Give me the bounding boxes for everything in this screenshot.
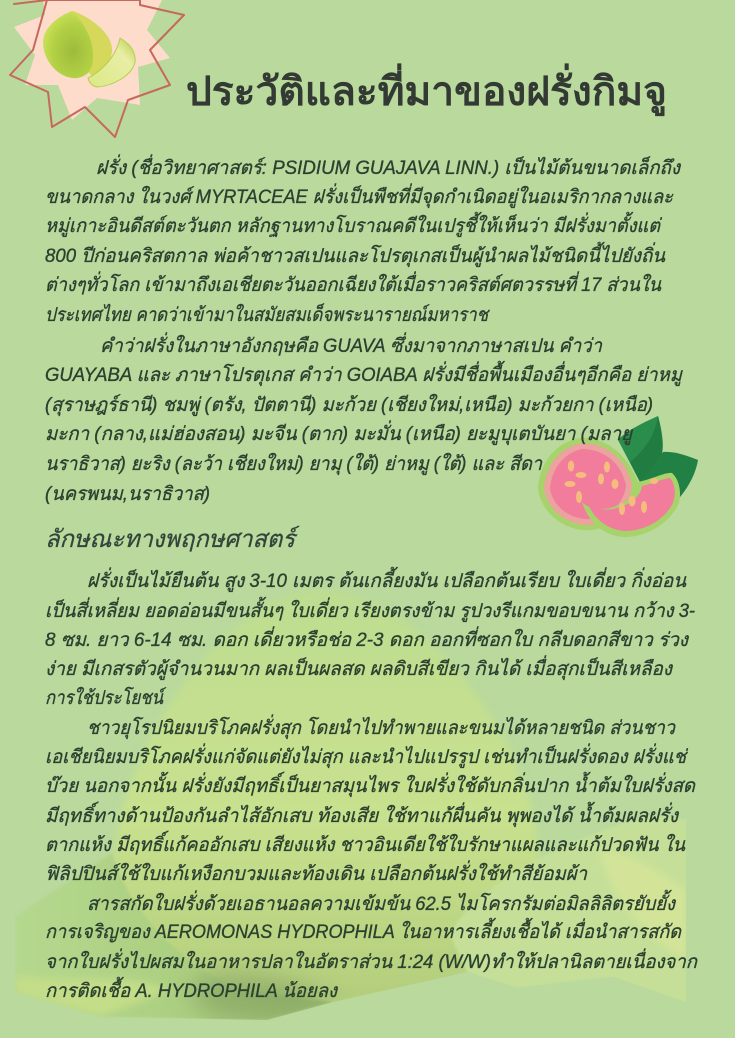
text block: extract research: การติดเชื้อ A. HYDROPHILA น้อยลง	[45, 976, 339, 1002]
icon: green guava with slice	[43, 11, 135, 87]
text block: uses: เอเชียนิยมบริโภคฝรั่งแก่จัดแต่ยังไม่สุก และนำไปแปรรูป เช่นทำเป็นฝรั่งดอง ฝรั่งแช่	[45, 743, 689, 768]
text block: names: GUAYABA และ ภาษาโปรตุเกส คำว่า GOIABA ฝรั่งมีชื่อพื้นเมืองอื่นๆอีกคือ ย่าหมู	[45, 360, 683, 386]
icon: guava slice	[582, 473, 680, 537]
text block: extract research: จากใบฝรั่งไปผสมในอาหารปลาในอัตราส่วน 1:24 (W/W)ทำให้ปลานิลตายเนื่องจาก	[45, 948, 698, 973]
text block: names: คำว่าฝรั่งในภาษาอังกฤษคือ GUAVA ซึ่งมาจากภาษาสเปน คำว่า	[100, 332, 603, 357]
icon: slice seeds	[619, 478, 658, 515]
text block: botanical description: 8 ซม. ยาว 6-14 ซม. ดอก เดี่ยวหรือช่อ 2-3 ดอก ออกที่ซอกใบ กลีบดอกสีขาว ร่วง	[45, 626, 690, 651]
text block: uses	[45, 714, 697, 885]
text block: botanical description: เป็นสี่เหลี่ยม ยอดอ่อนมีขนสั้นๆ ใบเดี่ยว เรียงตรงข้าม รูปวงรีแกมขอบขนาน กว้าง 3-	[45, 596, 695, 622]
leaf	[15, 853, 333, 1020]
guava slice	[88, 38, 135, 87]
text block: names: มะกา (กลาง,แม่ฮ่องสอน) มะจีน (ตาก) มะมั่น (เหนือ) ยะมูบุเตบันยา (มลายู	[45, 420, 634, 445]
text block: botanical description: ง่าย มีเกสรตัวผู้จำนวนมาก ผลเป็นผลสด ผลดิบสีเขียว กินได้ เมื่อสุกเป็นสีเหลือง	[45, 655, 674, 680]
text block: botanical description: ฝรั่งเป็นไม้ยืนต้น สูง 3-10 เมตร ต้นเกลี้ยงมัน เปลือกต้นเรียบ ใบเดี่ยว กิ่งอ่อน	[87, 566, 687, 592]
text block: history: ต่างๆทั่วโลก เข้ามาถึงเอเชียตะวันออกเฉียงใต้เมื่อราวคริสต์ศตวรรษที่ 17 ส่วนใน	[45, 271, 662, 296]
text block: names	[45, 332, 683, 505]
guava back section	[60, 11, 112, 76]
text block: uses: ชาวยุโรปนิยมบริโภคฝรั่งสุก โดยนำไปทำพายและขนมได้หลายชนิด ส่วนชาว	[87, 714, 676, 739]
heading: botanical characteristics: ลักษณะทางพฤกษศาสตร์	[45, 525, 300, 553]
icon: guava seeds	[564, 460, 618, 503]
star outline	[10, 0, 184, 137]
icon: pink guava with leaves	[538, 416, 698, 537]
title: ประวัติและที่มาของฝรั่งกิมจู	[186, 63, 667, 116]
text block: history: หมู่เกาะอินดีสต์ตะวันตก หลักฐานทางโบราณคดีในเปรูชี้ให้เห็นว่า มีฝรั่งมาตั้งแต่	[45, 211, 663, 237]
guava front section	[43, 11, 93, 78]
text block: names: (นครพนม,นราธิวาส)	[45, 484, 210, 505]
text block: history: 800 ปีก่อนคริสตกาล พ่อค้าชาวสเปนและโปรตุเกสเป็นผู้นำผลไม้ชนิดนี้ไปยังถิ่น	[45, 241, 666, 267]
text block: uses: ฟิลิปปินส์ใช้ใบแก้เหงือกบวมและท้องเดิน เปลือกต้นฝรั่งใช้ทำสีย้อมผ้า	[45, 860, 588, 885]
watermark guava photo	[15, 590, 690, 1020]
text block: names: (สุราษฎร์ธานี) ชมพู่ (ตรัง, ปัตตานี) มะก้วย (เชียงใหม่,เหนือ) มะก้วยกา (เหนือ)	[45, 393, 653, 416]
text block: history: ขนาดกลาง ในวงศ์ MYRTACEAE ฝรั่งเป็นพืชที่มีจุดกำเนิดอยู่ในอเมริกากลางและ	[45, 183, 674, 208]
text block: uses: บ๊วย นอกจากนั้น ฝรั่งยังมีฤทธิ์เป็นยาสมุนไพร ใบฝรั่งใช้ดับกลิ่นปาก น้ำต้มใบฝรั่งสด	[45, 771, 697, 797]
text block: extract research: สารสกัดใบฝรั่งด้วยเอธานอลความเข้มข้น 62.5 ไมโครกรัมต่อมิลลิลิตรยับยั้ง	[87, 889, 677, 915]
text block: extract research: การเจริญของ AEROMONAS HYDROPHILA ในอาหารเลี้ยงเชื้อได้ เมื่อนำสารสกัด	[45, 917, 683, 943]
text block: history: ฝรั่ง (ชื่อวิทยาศาสตร์: PSIDIUM GUAJAVA LINN.) เป็นไม้ต้นขนาดเล็กถึง	[96, 154, 682, 179]
peach star badge	[14, 0, 170, 120]
text block: history	[45, 154, 682, 326]
leaf shadow	[190, 972, 335, 1019]
text block: botanical description	[45, 566, 695, 680]
icon: guava leaves	[618, 416, 698, 497]
text block: names: นราธิวาส) ยะริง (ละว้า เชียงใหม่) ยามุ (ใต้) ย่าหมู (ใต้) และ สีดา	[45, 452, 543, 475]
lower right fruit	[450, 815, 690, 1005]
main fruit	[112, 590, 540, 1005]
text block: uses: ตากแห้ง มีฤทธิ์แก้คออักเสบ เสียงแห้ง ชาวอินเดียใช้ใบรักษาแผลและแก้ปวดฟัน ใน	[45, 830, 686, 856]
heading: uses: การใช้ประโยชน์	[45, 686, 167, 709]
icon: guava body	[538, 438, 638, 530]
text block: extract research	[45, 889, 698, 1002]
text block: history: ประเทศไทย คาดว่าเข้ามาในสมัยสมเด็จพระนารายณ์มหาราช	[45, 303, 490, 326]
text block: uses: มีฤทธิ์ทางด้านป้องกันลำไส้อักเสบ ท้องเสีย ใช้ทาแก้ผื่นคัน พุพองได้ น้ำต้มผลฝรั่ง	[45, 801, 680, 827]
